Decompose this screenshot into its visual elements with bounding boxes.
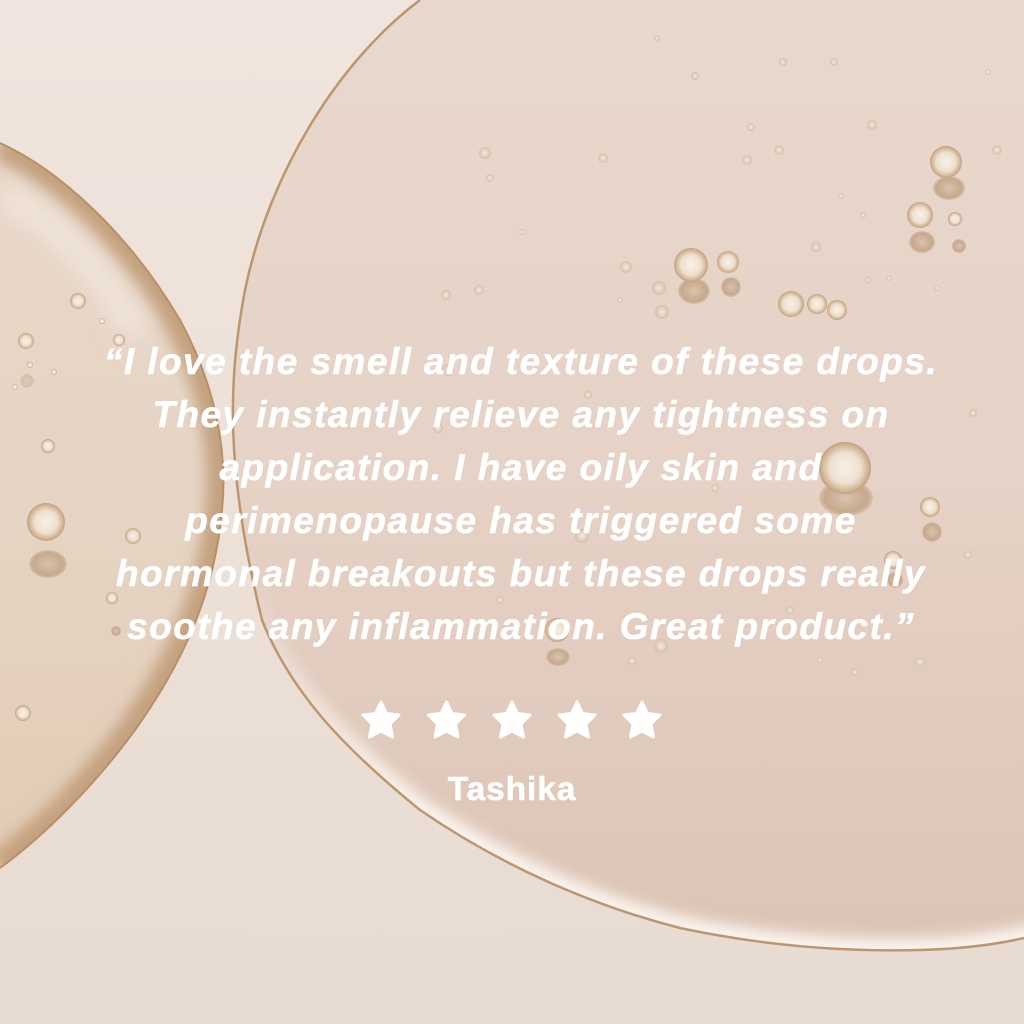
small bubbles xyxy=(433,35,1002,675)
testimonial quote xyxy=(104,341,938,647)
testimonial quote: perimenopause has triggered some xyxy=(185,500,857,541)
small oil drop xyxy=(0,143,223,868)
testimonial quote: hormonal breakouts but these drops really xyxy=(116,553,926,594)
testimonial quote: “I love the smell and texture of these drops. xyxy=(104,341,938,382)
testimonial quote: application. I have oily skin and xyxy=(220,447,822,488)
reviewer name: Tashika xyxy=(448,771,576,808)
testimonial quote: They instantly relieve any tightness on xyxy=(152,394,890,435)
left drop bubbles xyxy=(12,293,141,721)
large bubbles xyxy=(545,146,966,666)
testimonial quote: soothe any inflammation. Great product.” xyxy=(127,606,915,647)
large oil drop xyxy=(233,0,1024,950)
